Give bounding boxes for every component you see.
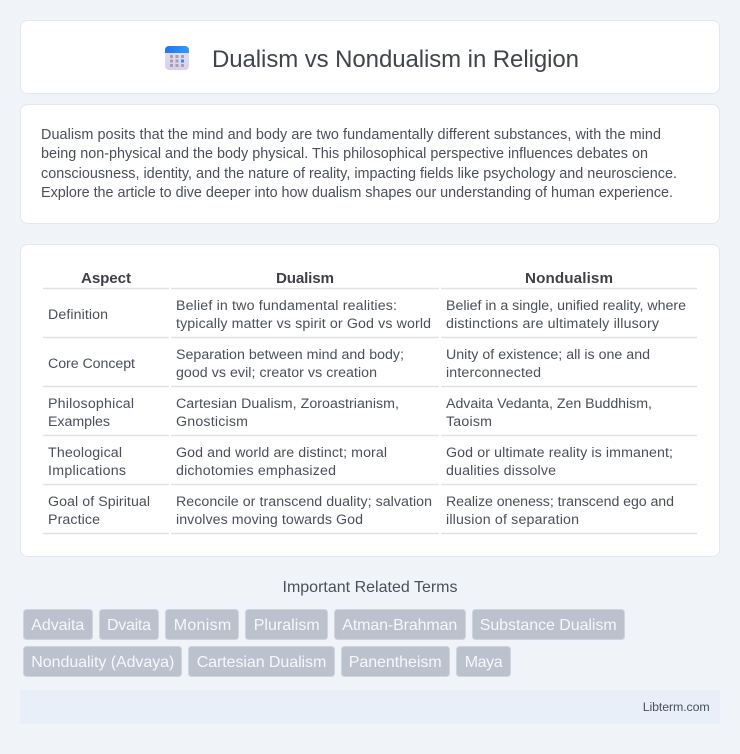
panel: comparison table	[20, 244, 720, 556]
row: theological implications: God or ultimate reality is immanent;	[446, 445, 673, 461]
chip: Monism	[166, 610, 238, 640]
description text	[41, 127, 677, 201]
footer	[20, 690, 720, 724]
row: core concept	[48, 347, 650, 381]
chip: Panentheism	[342, 646, 450, 676]
row: goal of spiritual practice: Goal of Spiritual	[48, 494, 150, 510]
row: definition: distinctions are ultimately illusory	[446, 316, 660, 332]
table header: Aspect	[81, 270, 131, 287]
row: goal of spiritual practice: involves moving towards God	[176, 512, 363, 528]
related terms heading: Important Related Terms	[282, 579, 458, 596]
chip: Atman-Brahman: Atman-Brahman	[342, 617, 457, 634]
chip: Maya: Maya	[465, 654, 503, 671]
chip: Substance Dualism	[472, 610, 624, 640]
panel: description	[20, 104, 720, 224]
chip: Pluralism: Pluralism	[254, 617, 320, 634]
row: theological implications: dualities dissolve	[446, 463, 556, 479]
chip: Advaita	[24, 610, 92, 640]
row: philosophical examples	[48, 396, 652, 430]
chip: Atman-Brahman	[334, 610, 466, 640]
table header: Nondualism	[525, 270, 613, 287]
chip: Cartesian Dualism: Cartesian Dualism	[197, 654, 326, 671]
chip: Panentheism: Panentheism	[349, 654, 442, 671]
row: goal of spiritual practice	[48, 494, 674, 528]
row: core concept: Core Concept	[48, 356, 135, 372]
row: goal of spiritual practice: Practice	[48, 512, 100, 528]
row: philosophical examples: Taoism	[446, 414, 492, 430]
row: philosophical examples: Cartesian Dualism, Zoroastrianism,	[176, 396, 399, 412]
row: theological implications: dichotomies emphasized	[176, 463, 336, 479]
description text: Dualism posits that the mind and body are two fundamentally different substances, with the mind	[41, 127, 661, 143]
table header	[81, 270, 613, 287]
description text: consciousness, identity, and the nature of reality, impacting fields like psychology and neuroscience.	[41, 166, 677, 182]
row: theological implications	[48, 445, 673, 479]
row: theological implications: Theological	[48, 445, 122, 461]
chip: Nonduality (Advaya): Nonduality (Advaya)	[31, 654, 174, 671]
row: core concept: Separation between mind and body;	[176, 347, 404, 363]
row: core concept: Unity of existence; all is one and	[446, 347, 650, 363]
chip: Advaita: Advaita	[31, 617, 84, 634]
chip: Maya	[456, 646, 510, 676]
row: philosophical examples: Advaita Vedanta, Zen Buddhism,	[446, 396, 652, 412]
row: definition: Definition	[48, 307, 108, 323]
row: core concept: interconnected	[446, 365, 541, 381]
icon: calendar	[165, 46, 189, 70]
row: definition: Belief in a single, unified reality, where	[446, 298, 686, 314]
footer credit: Libterm.com	[643, 700, 710, 714]
description text: being non-physical and the body physical. This philosophical perspective influences debates on	[41, 146, 648, 162]
row: definition	[48, 298, 686, 332]
chip: Dvaita	[100, 610, 158, 640]
chip: Dvaita: Dvaita	[107, 617, 151, 634]
chip: Cartesian Dualism	[188, 646, 334, 676]
row: definition: Belief in two fundamental realities:	[176, 298, 397, 314]
row: core concept: good vs evil; creator vs creation	[176, 365, 377, 381]
chip: Monism: Monism	[174, 617, 231, 634]
row: theological implications: God and world are distinct; moral	[176, 445, 387, 461]
row: goal of spiritual practice: Realize oneness; transcend ego and	[446, 494, 674, 510]
row: philosophical examples: Philosophical	[48, 396, 134, 412]
chip: Substance Dualism: Substance Dualism	[480, 617, 617, 634]
chip: Pluralism	[246, 610, 328, 640]
title: Dualism vs Nondualism in Religion	[212, 46, 579, 73]
chip: Nonduality (Advaya)	[24, 646, 182, 676]
row: theological implications: Implications	[48, 463, 126, 479]
row: philosophical examples: Examples	[48, 414, 110, 430]
description text: Explore the article to dive deeper into how dualism shapes our understanding of human experience.	[41, 185, 673, 201]
row: goal of spiritual practice: illusion of separation	[446, 512, 579, 528]
table rules	[43, 288, 697, 534]
row: definition: typically matter vs spirit or God vs world	[176, 316, 431, 332]
panel: header	[20, 20, 720, 94]
related terms chips	[24, 610, 624, 676]
row: philosophical examples: Gnosticism	[176, 414, 248, 430]
row: goal of spiritual practice: Reconcile or transcend duality; salvation	[176, 494, 432, 510]
table header: Dualism	[276, 270, 334, 287]
